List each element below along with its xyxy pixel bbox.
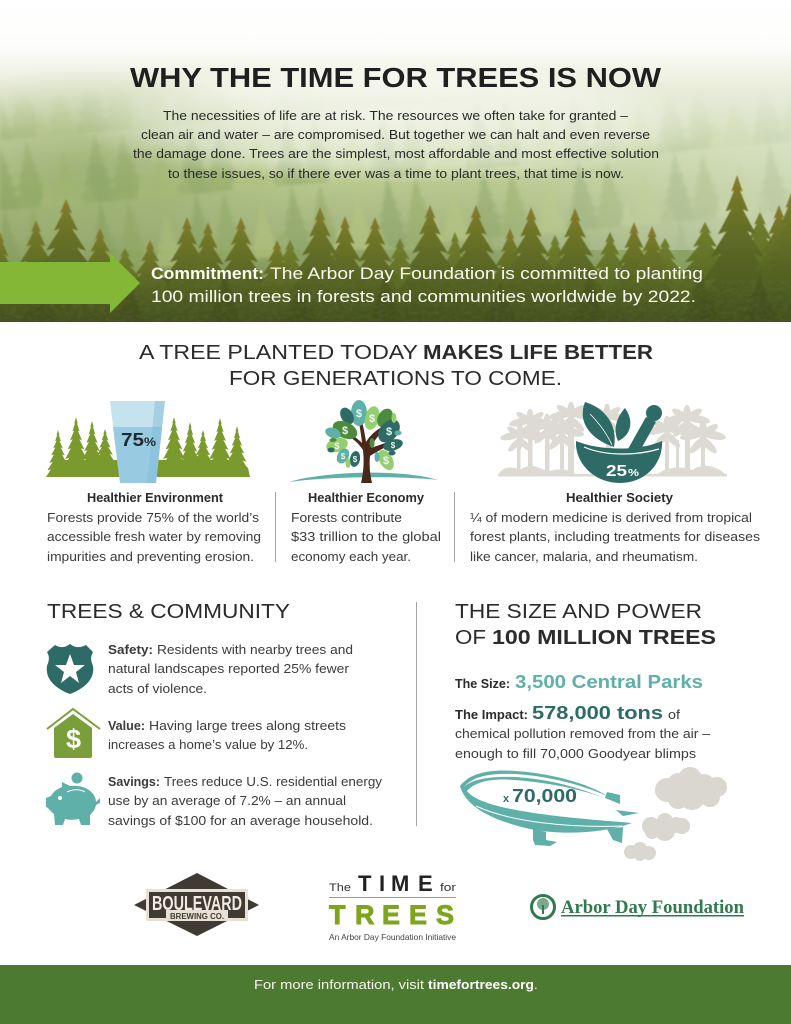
logo: the time for trees	[329, 871, 456, 942]
stat: the impact: of	[668, 707, 680, 722]
dollar signs on leaves: $	[353, 455, 358, 464]
logo: the time for trees: for	[440, 882, 456, 894]
icon: shield	[47, 644, 93, 694]
dollar signs on leaves: $	[341, 452, 346, 461]
heading: size and power: THE SIZE AND POWER	[455, 601, 702, 623]
stat: the size: 3,500 Central Parks	[515, 672, 703, 692]
column: healthier society: Healthier Society	[566, 490, 674, 505]
label: 75%: %	[144, 435, 156, 449]
text: savings: savings of $100 for an average household.	[108, 813, 373, 828]
column: healthier society: like cancer, malaria, and rheumatism.	[470, 549, 698, 564]
heading: a tree planted today: MAKES LIFE BETTER	[423, 342, 654, 364]
footer text	[254, 977, 538, 992]
commitment text: Commitment:	[151, 264, 264, 283]
treeline: lower canopy	[124, 269, 765, 308]
column: healthier environment: Forests provide 75% of the world’s	[47, 510, 260, 525]
logo: the time for trees: An Arbor Day Foundation Initiative	[329, 932, 456, 942]
heading: a tree planted today	[139, 342, 654, 390]
commitment text: 100 million trees in forests and communities worldwide by 2022.	[151, 287, 696, 306]
text: savings: Savings:	[108, 774, 160, 789]
dollar signs on leaves	[334, 408, 396, 467]
stat: the impact: The Impact:	[455, 707, 528, 722]
footer band	[0, 965, 791, 1024]
heading: a tree planted today: A TREE PLANTED TODAY	[139, 342, 418, 364]
stat: the impact: 578,000 tons	[532, 703, 663, 723]
label: x70,000: 70,000	[512, 786, 577, 806]
column: healthier environment: accessible fresh water by removing	[47, 529, 261, 544]
text: value: increases a home’s value by 12%.	[108, 737, 308, 752]
column: healthier society: ¼ of modern medicine is derived from tropical	[470, 510, 752, 525]
text: safety: acts of violence.	[108, 681, 207, 696]
label: x70,000: x	[503, 793, 510, 805]
text: safety	[108, 642, 353, 696]
hero: forest photo	[0, 50, 791, 322]
column: healthier economy: $33 trillion to the global	[291, 529, 441, 544]
text: safety: Residents with nearby trees and	[157, 642, 353, 657]
heading: size and power: 100 MILLION TREES	[492, 627, 716, 649]
heading: trees and community: TREES & COMMUNITY	[47, 601, 290, 623]
column: healthier economy	[291, 490, 441, 564]
text: value: Value:	[108, 718, 145, 733]
logo: the time for trees: TREES	[329, 900, 454, 930]
stat: the impact	[455, 703, 711, 761]
dollar signs on leaves: $	[386, 426, 392, 438]
column: healthier environment	[47, 490, 261, 564]
icon: money tree	[289, 400, 438, 483]
stat: the size	[455, 672, 703, 692]
column: healthier environment: impurities and preventing erosion.	[47, 549, 254, 564]
column: healthier economy: Healthier Economy	[308, 490, 425, 505]
dollar signs on leaves: $	[391, 441, 396, 450]
dollar signs on leaves: $	[334, 441, 340, 451]
label: 25%: 25	[606, 463, 627, 480]
leaves	[324, 400, 404, 473]
dollar signs on leaves: $	[369, 413, 375, 425]
icon: palm trees and mortar	[498, 402, 727, 483]
label: 75%	[121, 430, 156, 450]
label: 25%: %	[628, 468, 639, 479]
arrow: commitment	[0, 253, 140, 313]
dollar signs on leaves: $	[383, 455, 389, 467]
icon: house with dollar: $	[66, 724, 81, 754]
footer text: timefortrees.org	[428, 977, 534, 992]
column: healthier society	[470, 490, 761, 564]
column: healthier economy: Forests contribute	[291, 510, 402, 525]
text: savings	[108, 774, 383, 828]
column: healthier society: forest plants, including treatments for diseases	[470, 529, 761, 544]
text: value: Having large trees along streets	[149, 718, 347, 733]
text: savings: Trees reduce U.S. residential energy	[164, 774, 383, 789]
title: WHY THE TIME FOR TREES IS NOW	[130, 62, 662, 93]
stat: the impact: enough to fill 70,000 Goodyear blimps	[455, 746, 697, 761]
dollar signs on leaves: $	[342, 425, 348, 437]
text: safety: natural landscapes reported 25% fewer	[108, 661, 350, 676]
logo: boulevard brewing: BOULEVARD	[152, 893, 242, 915]
logo: the time for trees: TIME	[358, 871, 433, 896]
footer text: For more information, visit	[254, 977, 424, 992]
treeline: front row	[0, 174, 791, 301]
icon: pollution clouds	[624, 767, 727, 861]
commitment text	[151, 264, 703, 306]
heading: size and power	[455, 601, 716, 649]
text: safety: Safety:	[108, 642, 153, 657]
label: 25%	[606, 463, 639, 480]
stat: the impact: chemical pollution removed from the air –	[455, 726, 711, 741]
column: healthier environment: Healthier Environment	[87, 490, 224, 505]
intro paragraph: to these issues, so if there ever was a time to plant trees, that time is now.	[168, 167, 624, 181]
label: 75%: 75	[121, 430, 144, 450]
commitment text: The Arbor Day Foundation is committed to planting	[270, 264, 703, 283]
dollar signs on leaves: $	[356, 408, 362, 420]
treeline: back row	[118, 212, 771, 299]
icon: blimp	[460, 771, 639, 846]
intro paragraph	[133, 109, 659, 181]
intro paragraph: The necessities of life are at risk. The resources we often take for granted –	[163, 109, 628, 123]
footer text: .	[534, 977, 538, 992]
treeline: solid base	[135, 278, 686, 288]
icon: forest and water glass	[46, 401, 250, 483]
text: savings: use by an average of 7.2% – an annual	[108, 793, 346, 808]
intro paragraph: clean air and water – are compromised. But together we can halt and even reverse	[141, 128, 650, 142]
column: healthier economy: economy each year.	[291, 549, 411, 564]
icon: house with dollar	[47, 709, 100, 758]
heading: size and power: OF	[455, 627, 486, 649]
logo: boulevard brewing	[134, 873, 259, 936]
logo: the time for trees: The	[329, 882, 351, 894]
intro paragraph: the damage done. Trees are the simplest, most affordable and most effective solution	[133, 147, 659, 161]
stat: the size: The Size:	[455, 676, 510, 691]
logo: boulevard brewing: BREWING CO.	[170, 912, 224, 921]
heading: a tree planted today: FOR GENERATIONS TO COME.	[229, 368, 562, 390]
logo: arbor day foundation: Arbor Day Foundation	[561, 898, 745, 918]
icon: piggy bank	[46, 772, 100, 825]
text: value	[108, 718, 347, 752]
